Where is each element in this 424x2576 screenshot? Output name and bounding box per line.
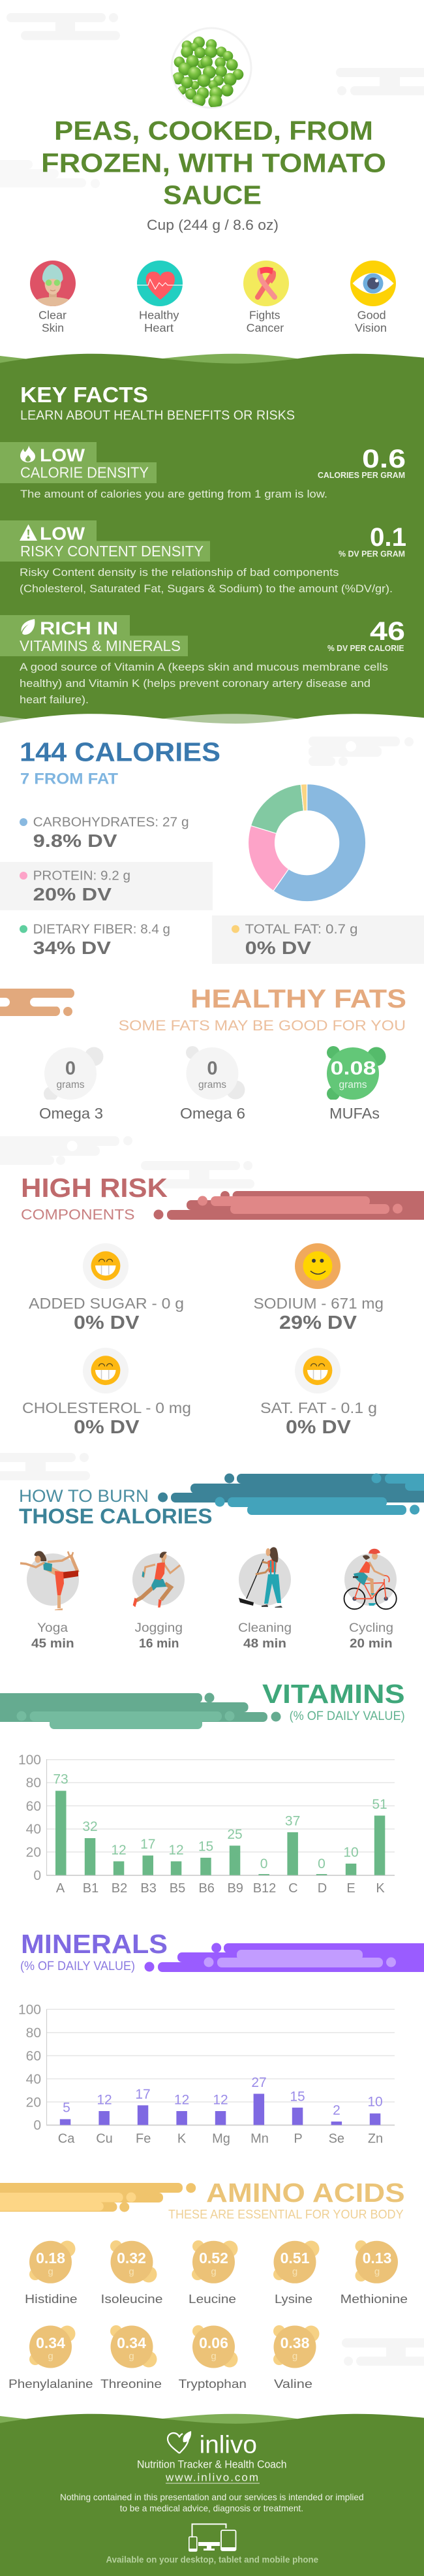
- stat: omega 3: [39, 1047, 103, 1122]
- amino: tryptophan: g: [211, 2351, 217, 2362]
- amino: tryptophan: 0.06: [199, 2334, 228, 2351]
- fact: low risky content density: Risky Content density is the relationship of bad components: [20, 566, 339, 579]
- panel: healthy fats: [0, 985, 406, 1122]
- benefit labels: Skin: [42, 321, 64, 334]
- activity labels: [31, 1621, 393, 1651]
- panel: minerals: [18, 1929, 424, 2146]
- bar chart: minerals: Zn: [368, 2132, 383, 2146]
- risk: added sugar: [29, 1243, 184, 1333]
- bar chart: minerals: 80: [26, 2026, 41, 2041]
- fact: rich in vitamins and minerals: A good source of Vitamin A (keeps skin and mucous membrane cells: [20, 661, 388, 673]
- fact: rich in vitamins and minerals: [0, 615, 405, 706]
- amino: isoleucine: [100, 2240, 163, 2306]
- heading: key facts: LEARN ABOUT HEALTH BENEFITS OR RISKS: [20, 409, 295, 423]
- bar chart: minerals: Ca: [58, 2132, 75, 2146]
- title: [41, 116, 386, 210]
- heading: how to burn: HOW TO BURN: [19, 1486, 149, 1506]
- amino: phenylalanine: Phenylalanine: [8, 2377, 93, 2391]
- bar chart: vitamins: 12: [111, 1843, 127, 1858]
- amino: threonine: 0.34: [117, 2334, 146, 2351]
- activity labels: 20 min: [350, 1637, 393, 1651]
- bar chart: minerals: 20: [26, 2095, 41, 2110]
- activity labels: Cycling: [349, 1621, 393, 1635]
- bar chart: vitamins: [18, 1753, 395, 1896]
- fact: low risky content density: LOW: [40, 524, 85, 544]
- amino: threonine: Threonine: [100, 2377, 162, 2391]
- benefit labels: Cancer: [247, 321, 284, 334]
- bar chart: minerals: P: [294, 2132, 303, 2146]
- icon: warning: [20, 524, 37, 541]
- amino: methionine: Methionine: [341, 2292, 408, 2306]
- bar chart: minerals: Fe: [136, 2132, 151, 2146]
- bar chart: vitamins: 0: [260, 1856, 267, 1871]
- disclaimer: [60, 2492, 364, 2513]
- bar chart: vitamins: 37: [285, 1814, 300, 1828]
- stat: omega 3: 0: [65, 1058, 76, 1079]
- background clouds: top: [0, 13, 424, 188]
- amino: threonine: [100, 2325, 162, 2391]
- subheading: components: COMPONENTS: [21, 1207, 134, 1223]
- stat: omega 6: [180, 1046, 245, 1122]
- logo: inlivo: inlivo: [200, 2431, 257, 2458]
- availability note: Available on your desktop, tablet and mobile phone: [106, 2555, 318, 2565]
- serving size: Cup (244 g / 8.6 oz): [147, 217, 279, 233]
- title: FROZEN, WITH TOMATO: [41, 148, 386, 178]
- icon: flame: [20, 445, 35, 462]
- panel: vitamins: [0, 1679, 405, 1896]
- amino: lysine: g: [292, 2266, 297, 2277]
- risk: cholesterol: CHOLESTEROL - 0 mg: [22, 1399, 191, 1416]
- bar chart: vitamins: 17: [140, 1837, 155, 1852]
- amino: lysine: [273, 2241, 320, 2306]
- title: SAUCE: [163, 180, 262, 210]
- amino: leucine: [189, 2240, 237, 2306]
- icon: clear skin: [30, 261, 76, 309]
- risk: saturated fat: 0% DV: [286, 1417, 352, 1438]
- bar chart: minerals: 2: [333, 2103, 341, 2118]
- tagline: Nutrition Tracker & Health Coach: [137, 2458, 287, 2471]
- amino: leucine: Leucine: [189, 2292, 236, 2306]
- bar chart: vitamins: 51: [372, 1797, 387, 1812]
- fact: rich in vitamins and minerals: % DV PER CALORIE: [327, 643, 404, 653]
- bar chart: minerals: Mg: [212, 2132, 230, 2146]
- amino: isoleucine: 0.32: [117, 2250, 146, 2266]
- bar chart: vitamins: 32: [82, 1819, 98, 1834]
- amino: methionine: 0.13: [363, 2250, 391, 2266]
- subheading: SOME FATS MAY BE GOOD FOR YOU: [119, 1017, 406, 1034]
- bar chart: vitamins: B1: [83, 1881, 98, 1896]
- macro: carbohydrates: [20, 816, 189, 851]
- bar chart: minerals: 40: [26, 2072, 41, 2087]
- risk: sodium: SODIUM - 671 mg: [253, 1295, 384, 1312]
- bar chart: minerals: 5: [63, 2100, 70, 2116]
- macro: carbohydrates: 9.8% DV: [33, 831, 117, 851]
- stat: omega 3: Omega 3: [39, 1105, 103, 1122]
- macro: protein: PROTEIN: 9.2 g: [33, 869, 130, 883]
- heading: those calories: THOSE CALORIES: [19, 1504, 213, 1528]
- heading: 144 calories: 144 CALORIES: [20, 737, 220, 767]
- panel: high risk components: [21, 1173, 424, 1438]
- bar chart: vitamins: 73: [53, 1772, 68, 1787]
- icon: leaf: [22, 619, 35, 635]
- heading: key facts: KEY FACTS: [20, 383, 148, 407]
- background clouds: mid: [0, 1136, 254, 1188]
- benefit labels: Healthy: [139, 309, 179, 322]
- bar chart: vitamins: 25: [227, 1827, 243, 1842]
- benefit labels: Vision: [355, 321, 387, 334]
- bar chart: vitamins: B9: [227, 1881, 243, 1896]
- bar chart: minerals: 27: [251, 2075, 267, 2090]
- risk: added sugar: ADDED SUGAR - 0 g: [29, 1295, 184, 1312]
- bar chart: minerals: 10: [367, 2095, 383, 2109]
- bar chart: vitamins: D: [318, 1881, 327, 1896]
- macro: dietary fiber: DIETARY FIBER: 8.4 g: [33, 922, 170, 936]
- amino: valine: [273, 2325, 320, 2391]
- amino: tryptophan: Tryptophan: [179, 2377, 247, 2391]
- bar chart: vitamins: 0: [33, 1868, 41, 1883]
- amino: histidine: 0.18: [36, 2250, 65, 2266]
- subheading: THESE ARE ESSENTIAL FOR YOUR BODY: [168, 2208, 404, 2222]
- bar chart: vitamins: 100: [18, 1753, 41, 1768]
- amino: valine: g: [292, 2351, 297, 2362]
- stat: MUFAs: MUFAs: [329, 1105, 380, 1122]
- amino: tryptophan: [179, 2325, 247, 2391]
- amino: leucine: g: [211, 2266, 217, 2277]
- bar chart: vitamins: 60: [26, 1799, 41, 1814]
- risk: cholesterol: 0% DV: [74, 1417, 140, 1438]
- fact: low risky content density: [0, 520, 406, 595]
- bar chart: vitamins: 15: [198, 1839, 213, 1854]
- benefit labels: [38, 309, 387, 334]
- bar chart: vitamins: 80: [26, 1775, 41, 1790]
- amino: isoleucine: Isoleucine: [100, 2292, 163, 2306]
- benefit labels: Good: [357, 309, 386, 322]
- macro: carbohydrates: CARBOHYDRATES: 27 g: [33, 816, 189, 830]
- stat: omega 6: Omega 6: [180, 1105, 245, 1122]
- amino: histidine: Histidine: [25, 2292, 78, 2306]
- risk: sodium: 29% DV: [279, 1312, 357, 1333]
- bar chart: minerals: 0: [33, 2118, 41, 2133]
- bar chart: vitamins: 12: [168, 1843, 184, 1858]
- heading: high risk: HIGH RISK: [21, 1173, 168, 1203]
- fact: low calorie density: LOW: [40, 445, 85, 465]
- fact: low calorie density: 0.6: [362, 445, 406, 473]
- fact: low risky content density: % DV PER GRAM: [339, 549, 405, 559]
- bar chart: vitamins: B3: [140, 1881, 157, 1896]
- fact: low risky content density: 0.1: [370, 523, 406, 552]
- bar chart: vitamins: E: [346, 1881, 356, 1896]
- bar chart: vitamins: B6: [198, 1881, 215, 1896]
- amino: methionine: [341, 2240, 408, 2306]
- bar chart: vitamins: 40: [26, 1822, 41, 1837]
- bar chart: minerals: 12: [213, 2092, 228, 2108]
- heading: amino acids: AMINO ACIDS: [206, 2178, 405, 2208]
- bar chart: minerals: Cu: [96, 2132, 113, 2146]
- fact: rich in vitamins and minerals: RICH IN: [40, 618, 118, 639]
- activity: jogging: [132, 1551, 185, 1607]
- macro: protein: [0, 862, 213, 910]
- macro: dietary fiber: 34% DV: [33, 938, 111, 958]
- bar chart: minerals: K: [177, 2132, 187, 2146]
- amino: isoleucine: g: [129, 2266, 134, 2277]
- amino: phenylalanine: g: [48, 2351, 53, 2362]
- activity labels: Cleaning: [238, 1621, 292, 1635]
- macro: total fat: TOTAL FAT: 0.7 g: [245, 922, 357, 936]
- bar chart: vitamins: A: [56, 1881, 65, 1896]
- amino: histidine: [25, 2241, 78, 2306]
- activity: cleaning: [239, 1547, 291, 1608]
- macro: dietary fiber: [20, 922, 170, 958]
- macro: total fat: [212, 915, 424, 964]
- icon: devices: [189, 2524, 236, 2551]
- background cloud: burn: [0, 1453, 90, 1480]
- bar chart: vitamins: 0: [318, 1856, 326, 1871]
- bar chart: vitamins: B12: [253, 1881, 276, 1896]
- fact: low calorie density: The amount of calories you are getting from 1 gram is low.: [20, 488, 327, 500]
- amino: phenylalanine: 0.34: [36, 2334, 65, 2351]
- amino: leucine: 0.52: [199, 2250, 228, 2266]
- bar chart: minerals: 12: [97, 2092, 112, 2108]
- bar chart: minerals: 15: [290, 2090, 305, 2104]
- activity labels: 45 min: [31, 1637, 74, 1651]
- benefit labels: Clear: [38, 309, 67, 322]
- benefit labels: Heart: [144, 321, 174, 334]
- risk: added sugar: 0% DV: [74, 1312, 140, 1333]
- fact: rich in vitamins and minerals: 46: [370, 617, 405, 646]
- bar chart: minerals: 60: [26, 2049, 41, 2063]
- macro: total fat: 0% DV: [245, 938, 311, 958]
- heading: healthy fats: HEALTHY FATS: [190, 985, 406, 1013]
- bar chart: minerals: Se: [329, 2132, 344, 2146]
- fact: rich in vitamins and minerals: heart failure).: [20, 693, 89, 706]
- activity labels: Jogging: [134, 1621, 183, 1635]
- panel: footer: [0, 2414, 424, 2576]
- bar chart: vitamins: B2: [112, 1881, 127, 1896]
- decorative banner: yellow: [0, 2183, 196, 2212]
- bar chart: minerals: 12: [174, 2092, 189, 2108]
- amino: phenylalanine: [8, 2326, 93, 2391]
- activity: cycling: [344, 1549, 397, 1609]
- fact: low risky content density: (Cholesterol, Saturated Fat, Sugars & Sodium) to the amount (%DV/gr).: [20, 582, 393, 595]
- amino: valine: 0.38: [280, 2334, 310, 2351]
- icon: healthy heart: [137, 261, 183, 306]
- risk: cholesterol: [22, 1348, 191, 1438]
- bar chart: minerals: 100: [18, 2002, 41, 2018]
- bar chart: vitamins: 10: [343, 1845, 359, 1860]
- decorative banner: red: [154, 1191, 424, 1220]
- fact: low risky content density: RISKY CONTENT DENSITY: [20, 543, 204, 560]
- stat: MUFAs: grams: [339, 1079, 367, 1090]
- risk: saturated fat: [260, 1348, 377, 1438]
- bar chart: vitamins: B5: [170, 1881, 185, 1896]
- disclaimer: Nothing contained in this presentation and our services is intended or implied: [60, 2492, 364, 2502]
- icon: fights cancer ribbon: [243, 261, 289, 306]
- heading: vitamins: VITAMINS: [262, 1679, 405, 1709]
- amino: threonine: g: [129, 2351, 134, 2362]
- fact: rich in vitamins and minerals: healthy) and Vitamin K (helps prevent coronary artery disease and: [20, 677, 371, 690]
- fact: low calorie density: [0, 442, 406, 500]
- stat: omega 6: 0: [207, 1058, 218, 1079]
- fact: rich in vitamins and minerals: VITAMINS & MINERALS: [20, 637, 181, 654]
- stat: omega 6: grams: [198, 1079, 226, 1090]
- activity labels: Yoga: [37, 1621, 68, 1635]
- stat: MUFAs: [327, 1046, 386, 1122]
- risk: sodium: [253, 1243, 384, 1333]
- risk: saturated fat: SAT. FAT - 0.1 g: [260, 1399, 377, 1416]
- decorative banner: orange: [0, 989, 76, 1016]
- decorative banner: purple: [145, 1943, 424, 1972]
- activity labels: 16 min: [139, 1637, 179, 1651]
- bar chart: vitamins: 20: [26, 1845, 41, 1860]
- panel: how to burn those calories: [19, 1473, 424, 1651]
- bar chart: vitamins: C: [288, 1881, 298, 1896]
- amino: valine: Valine: [274, 2377, 312, 2391]
- icon: good vision eye: [350, 261, 396, 306]
- benefits row: [30, 261, 396, 334]
- benefit labels: Fights: [249, 309, 280, 322]
- panel: amino acids: [0, 2178, 408, 2391]
- bar chart: minerals: Mn: [250, 2132, 269, 2146]
- macro: protein: 20% DV: [33, 884, 112, 904]
- fact: low calorie density: CALORIES PER GRAM: [318, 470, 405, 480]
- food image: peas: [172, 28, 251, 108]
- activity: yoga: [20, 1551, 79, 1610]
- panel: key facts: [0, 354, 424, 735]
- donut chart: [249, 784, 366, 902]
- title: PEAS, COOKED, FROM: [54, 116, 373, 146]
- website link: www.inlivo.com: [165, 2471, 258, 2484]
- bar chart: vitamins: K: [376, 1881, 385, 1896]
- amino: lysine: 0.51: [280, 2250, 310, 2266]
- subheading: (% OF DAILY VALUE): [290, 1709, 405, 1723]
- subheading: from fat: 7 FROM FAT: [20, 771, 118, 788]
- background cloud: amino: [342, 2338, 424, 2366]
- panel: calories: [0, 737, 424, 964]
- activity labels: 48 min: [243, 1637, 286, 1651]
- heading: key facts: [20, 383, 295, 423]
- disclaimer: to be a medical advice, diagnosis or treatment.: [120, 2503, 303, 2513]
- bar chart: minerals: 17: [135, 2087, 151, 2102]
- stat: omega 3: grams: [56, 1079, 85, 1090]
- bar chart: minerals: [18, 2002, 395, 2146]
- amino: lysine: Lysine: [275, 2292, 312, 2306]
- fact: low calorie density: CALORIE DENSITY: [20, 464, 149, 481]
- heading: minerals: MINERALS: [21, 1929, 168, 1959]
- stat: MUFAs: 0.08: [330, 1058, 376, 1079]
- decorative banner: teal: [158, 1473, 424, 1515]
- decorative banner: green: [0, 1693, 280, 1729]
- logo: inlivo: [168, 2431, 257, 2458]
- amino: methionine: g: [374, 2266, 380, 2277]
- amino: histidine: g: [48, 2266, 53, 2277]
- subheading: (% OF DAILY VALUE): [20, 1960, 135, 1973]
